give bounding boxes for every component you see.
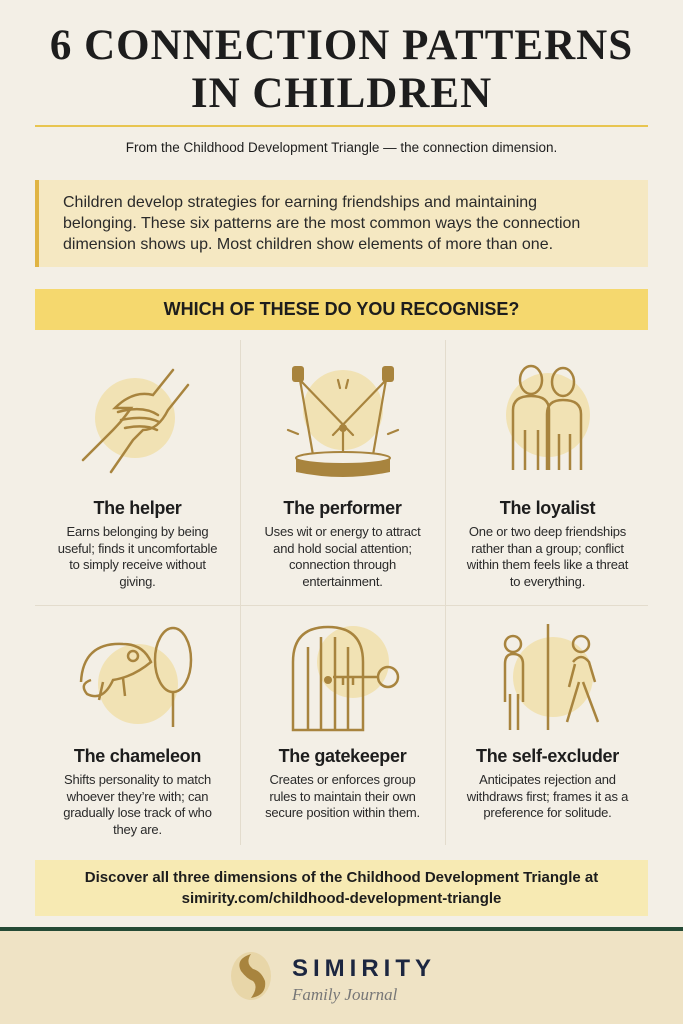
heading: The chameleon [74, 746, 201, 766]
title: IN CHILDREN [191, 70, 492, 117]
CTA box: Discover all three dimensions of the Childhood Development Triangle at [85, 869, 598, 886]
CTA box [35, 860, 648, 916]
panel: gatekeeper [265, 626, 420, 820]
CTA box: simirity.com/childhood-development-triangle [182, 890, 501, 907]
panel: performer [264, 366, 421, 588]
icon: hands [82, 368, 190, 474]
panel: self-excluder [466, 624, 628, 820]
icon: two people [506, 364, 590, 470]
brand text: SIMIRITY [292, 955, 436, 982]
gold rule [35, 125, 648, 127]
grid dividers [240, 340, 241, 845]
description: Shifts personality to match whoever they’re with; can gradually lose track of who they are. [63, 772, 212, 836]
panel: loyalist [466, 364, 628, 588]
heading: The loyalist [500, 498, 595, 518]
subtitle: From the Childhood Development Triangle — the connection dimension. [126, 140, 557, 155]
description: Uses wit or energy to attract and hold social attention; connection through entertainment. [264, 524, 421, 588]
heading: The gatekeeper [279, 746, 406, 766]
logo [231, 952, 436, 1004]
panel: helper [58, 368, 217, 588]
title: 6 CONNECTION PATTERNS [50, 22, 633, 69]
icon: chameleon and mirror [80, 626, 192, 727]
logo: Family Journal [292, 985, 397, 1004]
icon: stage [286, 366, 400, 477]
icon: door and key [292, 626, 400, 732]
footer [0, 927, 683, 1024]
description: Creates or enforces group rules to maintain their own secure position within them. [265, 772, 420, 820]
description: Earns belonging by being useful; finds it uncomfortable to simply receive without giving. [58, 524, 217, 588]
title [50, 22, 633, 117]
heading: The helper [93, 498, 182, 518]
banner heading [35, 289, 648, 330]
heading: The performer [283, 498, 402, 518]
icon: logo mark [231, 952, 271, 1000]
intro callout: Children develop strategies for earning friendships and maintaining belonging. These six patterns are the most common ways the connection dimension shows up. Most children show elements of more than one. [63, 194, 580, 253]
icon: walking figures with wall [504, 624, 600, 730]
heading: The self-excluder [476, 746, 619, 766]
description: Anticipates rejection and withdraws first; frames it as a preference for solitude. [467, 772, 628, 820]
description: One or two deep friendships rather than a group; conflict within them feels like a threat to everything. [467, 524, 628, 588]
banner heading: WHICH OF THESE DO YOU RECOGNISE? [164, 299, 519, 319]
panel: chameleon [63, 626, 212, 836]
intro callout [35, 180, 648, 267]
